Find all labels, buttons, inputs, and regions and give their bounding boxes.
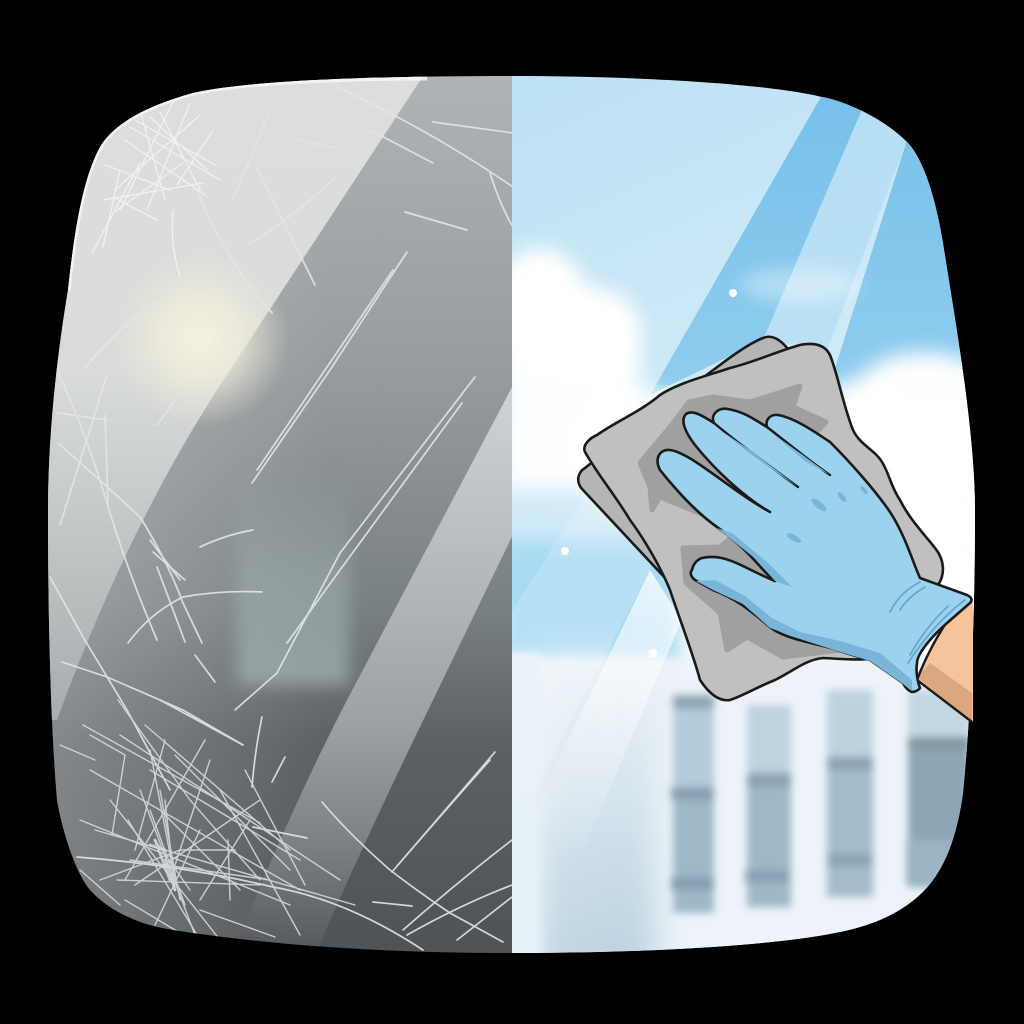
cloth shading: [640, 386, 840, 657]
sky strip: [650, 95, 864, 395]
building shaded left wing: [540, 658, 655, 978]
blurred building windows: [671, 690, 970, 913]
window column 3: [827, 690, 873, 897]
top rim highlight: [68, 78, 427, 290]
sparkles: [549, 289, 737, 658]
window column 4: [906, 690, 970, 887]
window column 2: [745, 705, 791, 907]
long scratches: [50, 87, 513, 950]
scratch cluster: top left: [92, 98, 220, 277]
wisp cloud: [740, 267, 860, 303]
illustration: scratched vs clean glass: [48, 76, 975, 953]
panel: scratched side: [48, 76, 512, 953]
icon: microfiber cloth: [578, 337, 943, 700]
translucent band between strips: [763, 105, 907, 350]
blurred building reflection: [237, 470, 349, 685]
light upper-left pane: [30, 60, 427, 720]
glove shadow: [696, 580, 912, 691]
glove cuff creases: [890, 582, 965, 663]
cloth front layer: [584, 344, 943, 700]
lower sky patch: [500, 540, 690, 665]
window column 1: [671, 695, 714, 913]
forearm shadow: [917, 663, 972, 722]
light diagonal band: [232, 372, 520, 955]
scratch hub: bottom cluster centre: [150, 840, 175, 890]
building left edge: [512, 648, 541, 953]
glove finger shadows: [717, 430, 869, 587]
icon: forearm: [917, 603, 973, 722]
sun glare: [140, 278, 283, 421]
panel: clean side: [512, 76, 975, 953]
clouds: [512, 239, 975, 662]
icon: blue glove hand: [658, 409, 972, 692]
cloth back layer: [578, 337, 800, 640]
panel: glass shape: [48, 76, 975, 953]
scratch cluster: bottom: [60, 700, 355, 945]
sky corner: [836, 142, 967, 400]
building body: [536, 654, 969, 953]
glove finger gap lines: [714, 423, 830, 487]
diagonal glass streak: [567, 570, 680, 786]
